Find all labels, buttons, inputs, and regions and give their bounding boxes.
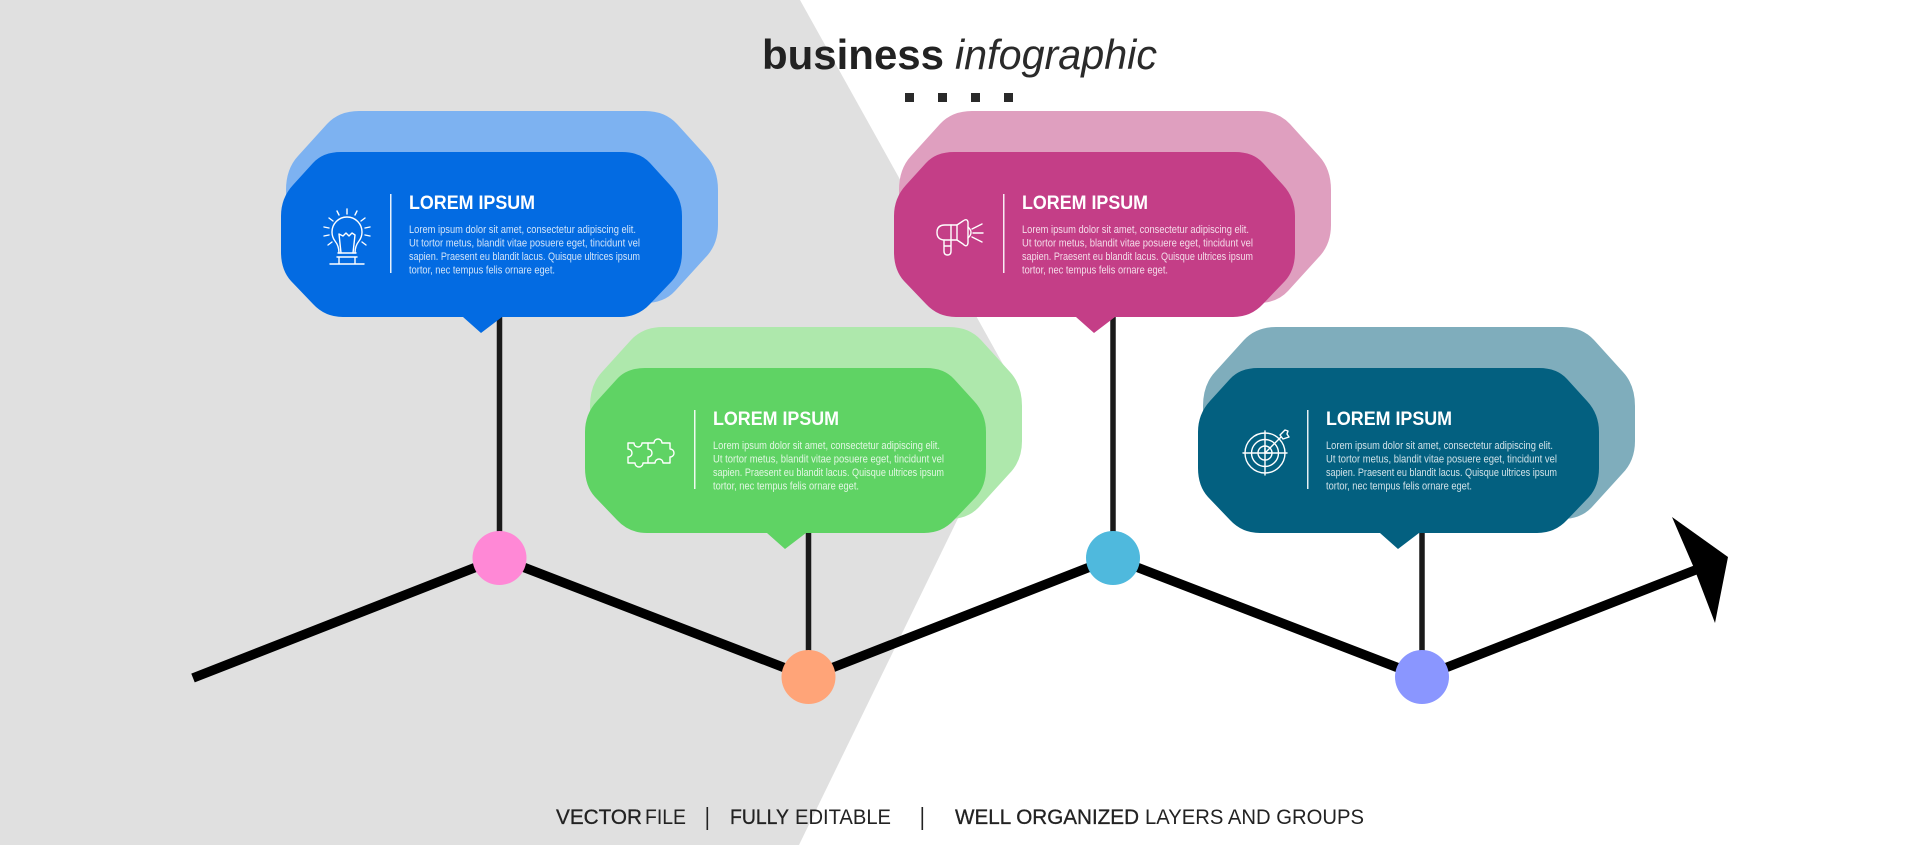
footer text: VECTOR — [556, 806, 642, 829]
divider — [390, 194, 392, 273]
icon: target — [1243, 430, 1289, 475]
panel: teal card — [1198, 327, 1635, 549]
title: infographic — [955, 31, 1157, 78]
body text: tortor, nec tempus felis ornare eget. — [409, 264, 555, 276]
blue front shape — [281, 152, 682, 333]
body text: sapien. Praesent eu blandit lacus. Quisque ultrices ipsum — [713, 467, 944, 479]
stem lines — [500, 310, 1422, 660]
icon: light bulb — [324, 209, 370, 264]
zigzag timeline line — [193, 558, 1698, 678]
body text: Ut tortor metus, blandit vitae posuere eget, tincidunt vel — [1022, 238, 1253, 250]
teal back shape — [1203, 327, 1635, 519]
heading: LOREM IPSUM — [713, 409, 839, 430]
icon: megaphone — [937, 220, 983, 255]
title dots — [905, 93, 1013, 102]
blue back shape — [286, 111, 718, 303]
panel: magenta card — [894, 111, 1331, 333]
arrow head — [1672, 517, 1728, 623]
title — [762, 31, 1157, 78]
body text: tortor, nec tempus felis ornare eget. — [1022, 264, 1168, 276]
heading: LOREM IPSUM — [1022, 193, 1148, 214]
divider — [1003, 194, 1004, 273]
body text — [1326, 440, 1557, 492]
body text — [1022, 224, 1253, 276]
body text: Lorem ipsum dolor sit amet, consectetur adipiscing elit. — [1022, 224, 1249, 236]
magenta front shape — [894, 152, 1295, 333]
body text: Lorem ipsum dolor sit amet, consectetur adipiscing elit. — [409, 224, 636, 236]
icon: puzzle — [628, 439, 674, 467]
divider — [1307, 410, 1308, 489]
heading: LOREM IPSUM — [1326, 409, 1452, 430]
divider — [694, 410, 696, 489]
body text: tortor, nec tempus felis ornare eget. — [713, 480, 859, 492]
panel: green card — [585, 327, 1022, 549]
body text: Ut tortor metus, blandit vitae posuere eget, tincidunt vel — [1326, 454, 1557, 466]
footer text: FILE — [645, 806, 686, 829]
heading: LOREM IPSUM — [409, 193, 535, 214]
footer text: EDITABLE — [795, 806, 891, 829]
title: business — [762, 31, 944, 78]
magenta back shape — [899, 111, 1331, 303]
footer text: WELL ORGANIZED — [955, 806, 1139, 829]
body text — [713, 440, 944, 492]
body text: Ut tortor metus, blandit vitae posuere eget, tincidunt vel — [713, 454, 944, 466]
footer text: FULLY — [730, 806, 789, 829]
panel: blue card — [281, 111, 718, 333]
node: orange — [782, 650, 836, 704]
footer text — [556, 806, 1364, 830]
body text: tortor, nec tempus felis ornare eget. — [1326, 480, 1472, 492]
body text: Ut tortor metus, blandit vitae posuere eget, tincidunt vel — [409, 238, 640, 250]
body text: sapien. Praesent eu blandit lacus. Quisque ultrices ipsum — [1326, 467, 1557, 479]
node: periwinkle — [1395, 650, 1449, 704]
node: sky blue — [1086, 531, 1140, 585]
node: pink — [472, 531, 526, 585]
footer text: LAYERS AND GROUPS — [1145, 806, 1364, 829]
body text: Lorem ipsum dolor sit amet, consectetur adipiscing elit. — [1326, 440, 1553, 452]
green front shape — [585, 368, 986, 549]
body text: Lorem ipsum dolor sit amet, consectetur adipiscing elit. — [713, 440, 940, 452]
green back shape — [590, 327, 1022, 519]
body text: sapien. Praesent eu blandit lacus. Quisque ultrices ipsum — [409, 251, 640, 263]
body text: sapien. Praesent eu blandit lacus. Quisque ultrices ipsum — [1022, 251, 1253, 263]
teal front shape — [1198, 368, 1599, 549]
body text — [409, 224, 640, 276]
grey background panel — [0, 0, 1019, 845]
